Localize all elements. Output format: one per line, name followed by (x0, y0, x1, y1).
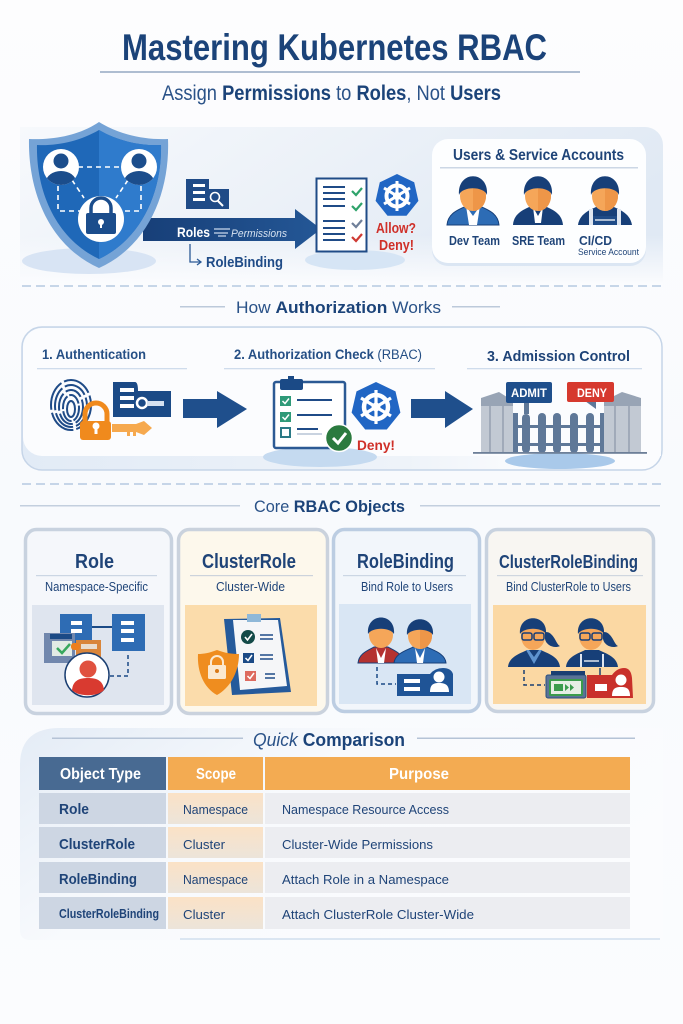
table row: ClusterRole (39, 827, 630, 858)
card title: RoleBinding: RoleBinding (357, 551, 454, 573)
card: Role (26, 530, 172, 714)
card subtitle: Bind Role to Users: Bind Role to Users (361, 580, 453, 594)
heading: quick comparison: Quick Comparison (253, 730, 405, 750)
arrow: roles to permissions (143, 209, 321, 249)
table row: ClusterRole: ClusterRole (59, 836, 135, 853)
card title: Role: Role (75, 551, 114, 573)
icon: fingerprint (51, 380, 91, 430)
labels: account names: Dev Team (449, 233, 500, 248)
table row: Role (39, 793, 630, 824)
labels: account names: SRE Team (512, 233, 565, 248)
icon: admission gate: ADMIT (511, 388, 547, 400)
table header: Object Type (60, 766, 141, 783)
table: comparison (39, 757, 630, 929)
card subtitle: Namespace-Specific: Namespace-Specific (45, 580, 148, 594)
card title: ClusterRole: ClusterRole (202, 551, 296, 573)
heading: how authorization works: How Authorization Works (236, 298, 441, 317)
icon: id card with key (113, 382, 171, 417)
table header (39, 757, 630, 790)
icon: kubernetes wheel (376, 174, 418, 216)
person: dev team (447, 176, 499, 225)
table header: Scope (196, 766, 236, 783)
illustration: role (44, 614, 145, 697)
step 1 heading: 1. Authentication (42, 347, 146, 362)
label: Allow or Deny: Deny! (379, 237, 414, 254)
icon: orange lock and key (80, 403, 152, 440)
panel: users and service accounts (432, 139, 646, 266)
card: ClusterRoleBinding (486, 530, 654, 712)
table row: RoleBinding: Namespace (183, 872, 248, 887)
table row: RoleBinding: Attach Role in a Namespace (282, 872, 449, 887)
labels: account names (449, 233, 639, 258)
table row: ClusterRoleBinding (39, 897, 630, 929)
table row: ClusterRoleBinding: Cluster (183, 907, 226, 922)
heading: users and service accounts: Users & Service Accounts (453, 147, 624, 164)
arrow: roles to permissions: Permissions (231, 228, 287, 240)
labels: account names: Service Account (578, 247, 639, 258)
icon: admission gate: DENY (577, 388, 607, 400)
table row: ClusterRoleBinding: ClusterRoleBinding (59, 907, 159, 921)
arrow: roles to permissions: Roles (177, 224, 210, 240)
panel: RBAC overview (20, 122, 663, 285)
table row: ClusterRoleBinding: Attach ClusterRole Cluster-Wide (282, 907, 474, 922)
label: Allow or Deny: Allow? (376, 220, 416, 237)
card: RoleBinding (334, 530, 480, 712)
table row: Role: Role (59, 801, 89, 818)
illustration: users with glasses and binding cards (508, 618, 633, 698)
panel: authorization flow (22, 327, 662, 470)
icon: kubernetes wheel (352, 382, 400, 430)
subtitle: Assign Permissions to Roles, Not Users (162, 82, 501, 105)
table header: Purpose (389, 766, 449, 783)
table row: RoleBinding (39, 862, 630, 893)
card subtitle: Cluster-Wide: Cluster-Wide (216, 580, 285, 594)
illustration: two users and binding card (358, 618, 453, 696)
card title: ClusterRoleBinding: ClusterRoleBinding (499, 551, 638, 572)
heading: core rbac objects: Core RBAC Objects (254, 497, 405, 516)
person: sre team (513, 176, 563, 225)
label: Deny: Deny! (357, 437, 395, 453)
arrow: step 1 to step 2 (183, 391, 247, 428)
table row: ClusterRole: Cluster-Wide Permissions (282, 837, 433, 852)
label: RoleBinding (190, 244, 283, 271)
step 3 heading: 3. Admission Control (487, 348, 630, 365)
table row: ClusterRole: Cluster (183, 837, 226, 852)
step 2 heading: 2. Authorization Check (RBAC) (234, 347, 422, 362)
icon: document search (186, 179, 229, 209)
title: Mastering Kubernetes RBAC (122, 27, 547, 68)
labels: account names: CI/CD (579, 233, 612, 248)
arrow: step 2 to step 3 (411, 391, 473, 428)
card: ClusterRole (178, 530, 328, 714)
card subtitle: Bind ClusterRole to Users: Bind ClusterRole to Users (506, 580, 631, 594)
icon: shield with users and lock (22, 122, 168, 274)
icon: admission gate (473, 382, 647, 469)
table row: Role: Namespace (183, 802, 248, 817)
person: ci/cd (578, 176, 632, 225)
illustration: clipboard and shield (198, 614, 291, 695)
label: Allow or Deny (376, 220, 416, 254)
label: RoleBinding: RoleBinding (206, 254, 283, 271)
table row: RoleBinding: RoleBinding (59, 871, 137, 888)
table row: Role: Namespace Resource Access (282, 802, 449, 817)
panel: quick comparison (20, 728, 663, 940)
icon: clipboard with checks (263, 376, 377, 467)
icon: checklist (305, 178, 405, 270)
